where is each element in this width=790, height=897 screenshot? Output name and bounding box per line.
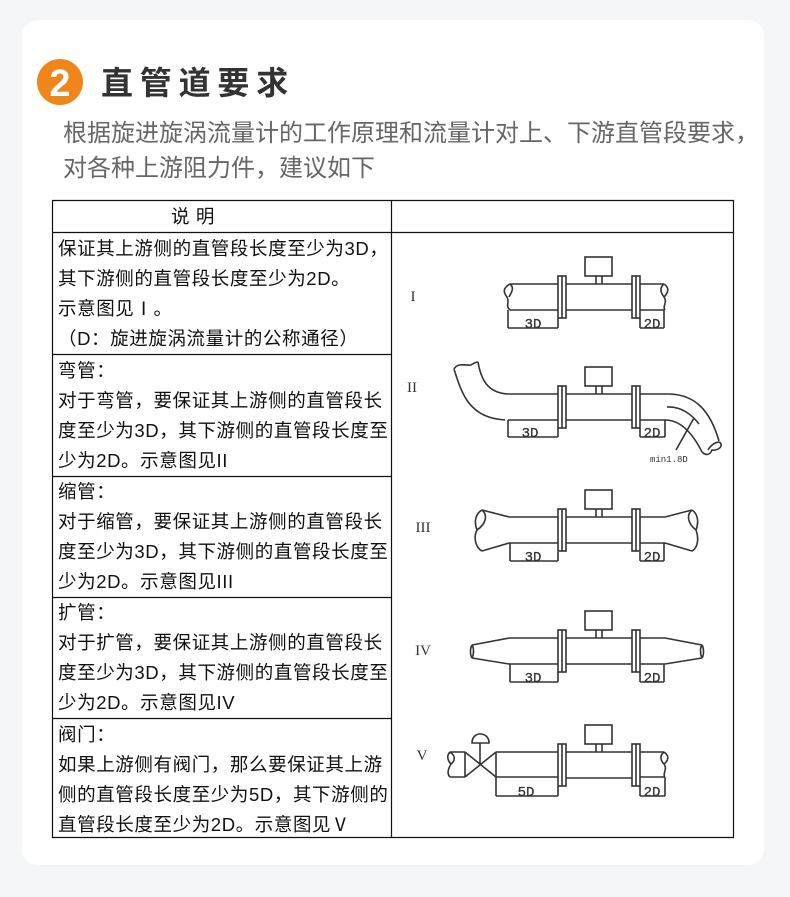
- diagram III: reducer pipe: 2D: [644, 550, 660, 566]
- diagram II: elbow pipe: min1.8D: [650, 455, 688, 465]
- table: [52, 200, 734, 838]
- row 1 text: 示意图见Ⅰ。: [58, 298, 173, 319]
- row 2 text: 弯管：: [58, 360, 115, 381]
- row 4 text: [58, 602, 388, 713]
- row 5 text: 阀门：: [58, 724, 115, 745]
- row 2 text: 度至少为3D，其下游侧的直管段长度至: [58, 420, 388, 441]
- diagram I: straight pipe: I: [410, 289, 416, 305]
- row 4 text: 少为2D。示意图见IV: [58, 692, 235, 713]
- row 3 text: 少为2D。示意图见III: [58, 571, 234, 592]
- diagram III: reducer pipe: [416, 490, 698, 566]
- row 1 text: 其下游侧的直管段长度至少为2D。: [58, 268, 350, 289]
- diagram IV: expander pipe: [415, 611, 704, 687]
- row 1 text: 保证其上游侧的直管段长度至少为3D，: [58, 238, 388, 259]
- row 3 text: [58, 481, 388, 592]
- diagram I: straight pipe: 2D: [644, 317, 660, 333]
- row 5 text: [58, 724, 388, 835]
- diagram V: valve: 2D: [644, 785, 660, 801]
- diagram II: elbow pipe: 2D: [644, 426, 660, 442]
- diagram II: elbow pipe: 3D: [522, 426, 538, 442]
- row 2 text: [58, 360, 388, 471]
- table grid: [52, 200, 734, 838]
- row 5 text: 如果上游侧有阀门，那么要保证其上游: [58, 754, 383, 775]
- row 4 text: 度至少为3D，其下游侧的直管段长度至: [58, 662, 388, 683]
- row 2 text: 对于弯管，要保证其上游侧的直管段长: [58, 390, 383, 411]
- row 3 text: 对于缩管，要保证其上游侧的直管段长: [58, 511, 383, 532]
- diagram IV: expander pipe: 2D: [644, 671, 660, 687]
- diagram V: valve: 5D: [518, 785, 534, 801]
- table header: 说 明: [171, 206, 215, 227]
- intro text: 根据旋进旋涡流量计的工作原理和流量计对上、下游直管段要求，: [63, 120, 759, 147]
- row 1 text: [58, 238, 388, 349]
- diagram III: reducer pipe: III: [416, 520, 430, 536]
- icon: number badge: 2: [49, 63, 71, 105]
- diagram V: valve: [417, 725, 668, 801]
- diagram I: straight pipe: 3D: [525, 317, 541, 333]
- diagram IV: expander pipe: 3D: [525, 671, 541, 687]
- row 5 text: 侧的直管段长度至少为5D，其下游侧的: [58, 784, 388, 805]
- title: 直管道要求: [101, 65, 295, 101]
- row 2 text: 少为2D。示意图见II: [58, 450, 228, 471]
- icon: number badge: [37, 59, 83, 105]
- row 1 text: （D：旋进旋涡流量计的公称通径）: [58, 328, 358, 349]
- row 3 text: 度至少为3D，其下游侧的直管段长度至: [58, 541, 388, 562]
- intro text: 对各种上游阻力件，建议如下: [63, 155, 375, 182]
- intro text: [63, 120, 759, 182]
- row 5 text: 直管段长度至少为2D。示意图见Ⅴ: [58, 814, 350, 835]
- row 4 text: 扩管：: [58, 602, 115, 623]
- row 3 text: 缩管：: [58, 481, 115, 502]
- diagram IV: expander pipe: IV: [415, 643, 431, 659]
- diagram I: straight pipe: [410, 257, 668, 333]
- diagram II: elbow pipe: II: [407, 380, 417, 396]
- row 4 text: 对于扩管，要保证其上游侧的直管段长: [58, 632, 383, 653]
- diagram V: valve: V: [417, 748, 428, 764]
- diagram III: reducer pipe: 3D: [525, 550, 541, 566]
- diagram II: elbow pipe: [407, 362, 721, 465]
